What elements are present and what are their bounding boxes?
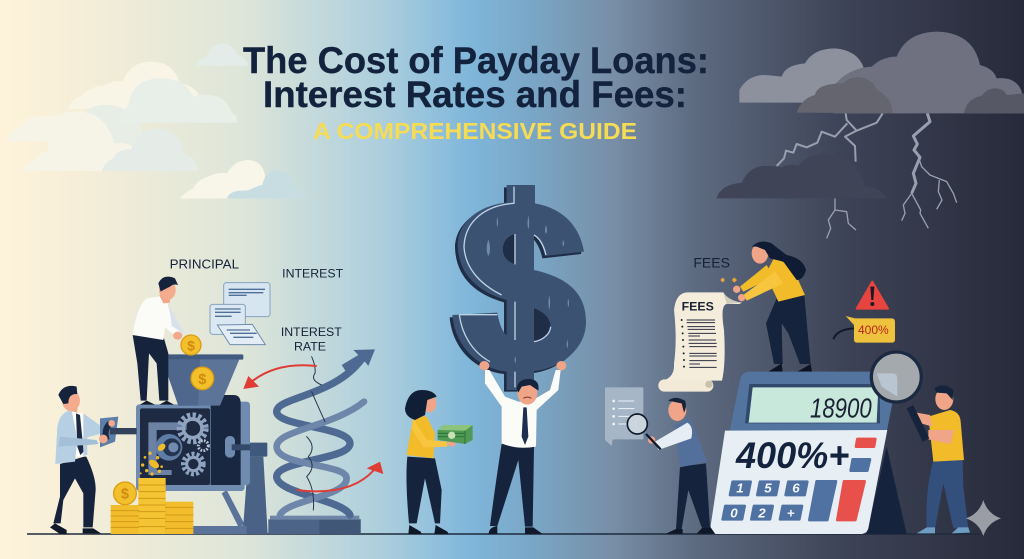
label: principal: PRINCIPAL: [170, 257, 239, 271]
icon: checklist note: [605, 387, 643, 446]
person: man lifting dollar: [479, 361, 566, 534]
arrow: red upward: [297, 462, 383, 491]
icon: fee receipt scroll: [658, 292, 742, 392]
falling coin: [181, 335, 201, 355]
coin in hopper: [191, 367, 214, 390]
callout: 400% badge: 400%: [858, 323, 889, 337]
gears: [179, 415, 208, 474]
person: woman with cash: [405, 390, 473, 534]
person: machine operator: [50, 386, 137, 534]
person: depositing coin: [133, 277, 184, 405]
light clouds, left: [7, 43, 305, 199]
person: man with large magnifier: [871, 352, 970, 533]
coins spilling: [140, 452, 163, 476]
icon: cash bundle: [438, 425, 473, 444]
label: fees: FEES: [693, 254, 730, 270]
person: woman on calculator: [720, 241, 812, 372]
panel: fees and calculator: [605, 241, 1001, 536]
calculator display: 18900: [810, 392, 872, 423]
icon: warning triangle: [857, 282, 888, 309]
hopper: [158, 354, 243, 406]
spiral interest helix: [268, 349, 375, 534]
calculator: 5: [764, 481, 772, 496]
icon: documents: [210, 283, 270, 345]
calculator: 1: [736, 481, 744, 496]
label: interest rate: INTEREST: [281, 325, 342, 339]
gold coin stacks: $: [121, 487, 129, 503]
coin in hopper: $: [198, 372, 206, 388]
title line 1: The Cost of Payday Loans:: [243, 39, 709, 81]
callout: 400% badge: [833, 316, 895, 343]
calculator: 6: [792, 481, 800, 496]
subtitle: A COMPREHENSIVE GUIDE: [313, 118, 637, 144]
grinder machine: [136, 395, 250, 491]
icon: sparkle watermark: [966, 500, 1001, 536]
person: man with magnifier and checklist: [605, 387, 715, 534]
calculator: 400%+: 400%+: [735, 434, 849, 476]
icon: giant dollar sign: [450, 185, 586, 392]
icon: fee receipt scroll: FEES: [682, 300, 714, 314]
title line 2: Interest Rates and Fees:: [263, 73, 687, 115]
arrow: red to hopper: [243, 365, 317, 389]
falling coin: $: [187, 337, 195, 353]
calculator keys: [723, 439, 875, 520]
calculator: 0: [730, 505, 738, 520]
storm clouds and lightning, right: [717, 32, 1024, 238]
title: [243, 39, 709, 144]
label: interest rate: RATE: [294, 340, 326, 354]
calculator: [711, 372, 907, 534]
gold coin stacks: [111, 478, 193, 534]
panel: loan machine scene: [50, 257, 383, 534]
calculator: 2: [757, 505, 766, 520]
panel: borrower carrying the dollar: [405, 185, 586, 534]
calculator: +: [787, 505, 795, 520]
machine stand: [192, 443, 268, 534]
label: interest: INTEREST: [282, 267, 344, 281]
ground line: [27, 533, 980, 535]
